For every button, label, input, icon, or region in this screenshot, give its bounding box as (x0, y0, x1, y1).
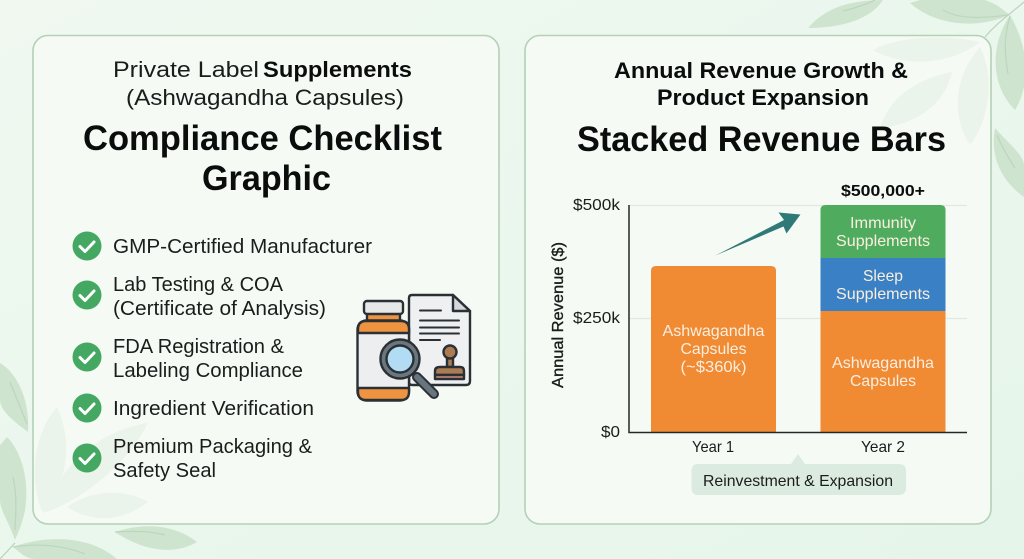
y axis labels: $500k (573, 197, 621, 214)
item: FDA (72, 336, 303, 382)
total label: $500,000+ (841, 183, 925, 200)
x axis labels (692, 439, 905, 456)
item: GMP: GMP-Certified Manufacturer (113, 236, 372, 258)
icon: bottle, document and magnifier (358, 295, 470, 400)
checklist (72, 232, 372, 482)
y axis labels (573, 197, 621, 441)
bar: year 2 stacked: Ashwagandha (832, 355, 934, 372)
item: FDA: Labeling Compliance (113, 360, 303, 382)
bar: year 1: Ashwagandha (662, 323, 765, 340)
panel watermark leaves (873, 37, 989, 145)
left heading: Compliance Checklist (83, 119, 442, 158)
x axis labels: Year 2 (861, 439, 905, 456)
right heading: Annual Revenue Growth & (614, 58, 908, 83)
item: ingredient: Ingredient Verification (113, 398, 314, 420)
right heading (577, 58, 946, 159)
y axis title: Annual Revenue ($) (550, 242, 567, 388)
item: FDA: FDA Registration & (113, 336, 285, 358)
botanical leaves: bottom left (0, 363, 197, 559)
panel watermark leaves (35, 407, 148, 518)
item: lab testing: Lab Testing & COA (113, 274, 284, 296)
bar: year 2 stacked: Immunity (850, 215, 916, 232)
left heading: Private Label (113, 57, 259, 82)
y axis labels: $0 (601, 424, 620, 441)
item: ingredient (72, 394, 314, 422)
bar: year 1 (651, 266, 776, 432)
bar: year 2 stacked: Capsules (850, 373, 916, 390)
panel: compliance checklist (33, 36, 499, 524)
bar: year 2 stacked: Supplements (836, 286, 930, 303)
left heading (83, 57, 442, 198)
growth arrow (716, 212, 800, 256)
left heading: Graphic (202, 159, 331, 198)
item: lab testing (72, 274, 326, 320)
callout: reinvestment: Reinvestment & Expansion (703, 473, 893, 490)
y axis labels: $250k (573, 310, 621, 327)
callout: reinvestment (692, 454, 906, 495)
panel: revenue bars (525, 36, 991, 524)
bar: year 2 stacked: Supplements (836, 233, 930, 250)
bar: year 1: Capsules (680, 341, 746, 358)
botanical leaves: top right (808, 0, 1024, 197)
left heading: (Ashwagandha Capsules) (126, 85, 404, 110)
x axis labels: Year 1 (692, 439, 734, 456)
item: packaging: Safety Seal (113, 460, 216, 482)
right heading: Product Expansion (657, 85, 869, 110)
item: GMP (72, 232, 372, 260)
left heading: Supplements (263, 57, 412, 82)
stacked bar chart (550, 183, 967, 495)
item: lab testing: (Certificate of Analysis) (113, 298, 326, 320)
item: packaging (72, 436, 313, 482)
bar: year 1: (~$360k) (680, 359, 746, 376)
bar: year 2 stacked: Sleep (863, 268, 903, 285)
right heading: Stacked Revenue Bars (577, 120, 946, 159)
bar: year 2 stacked (820, 205, 946, 432)
item: packaging: Premium Packaging & (113, 436, 313, 458)
